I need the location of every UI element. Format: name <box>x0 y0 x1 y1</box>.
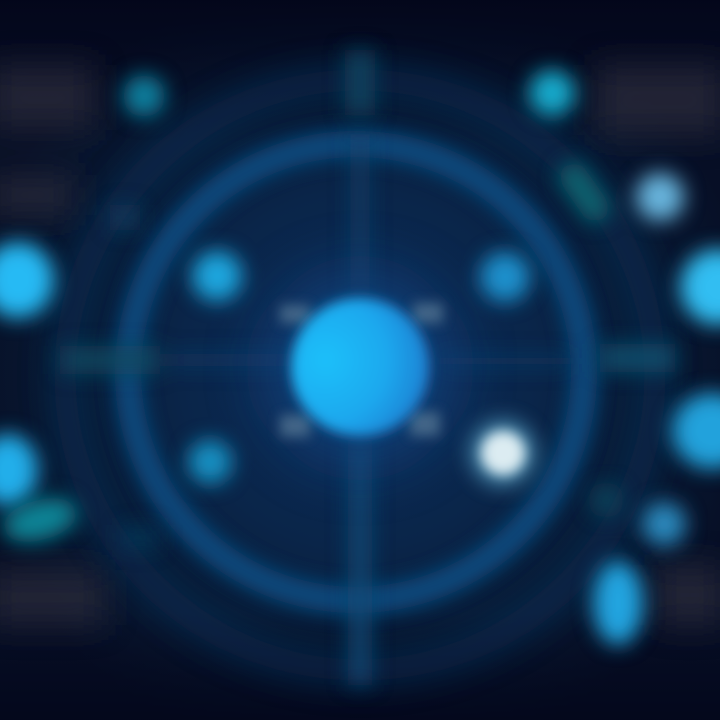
left edge nodes <box>0 242 54 506</box>
white node <box>469 419 537 487</box>
side text panels (blurred) <box>0 65 720 625</box>
rings <box>65 80 655 670</box>
left lower teal streak <box>0 491 82 549</box>
cross axes <box>60 50 675 685</box>
right edge nodes <box>672 249 720 469</box>
centre halo <box>265 273 455 463</box>
main ring <box>128 144 584 600</box>
lower right nodes <box>588 482 686 645</box>
corner ticks around core <box>280 303 443 437</box>
central node <box>291 298 429 436</box>
inner nodes <box>188 251 530 484</box>
upper nodes <box>123 70 684 227</box>
outer ring <box>65 80 655 670</box>
